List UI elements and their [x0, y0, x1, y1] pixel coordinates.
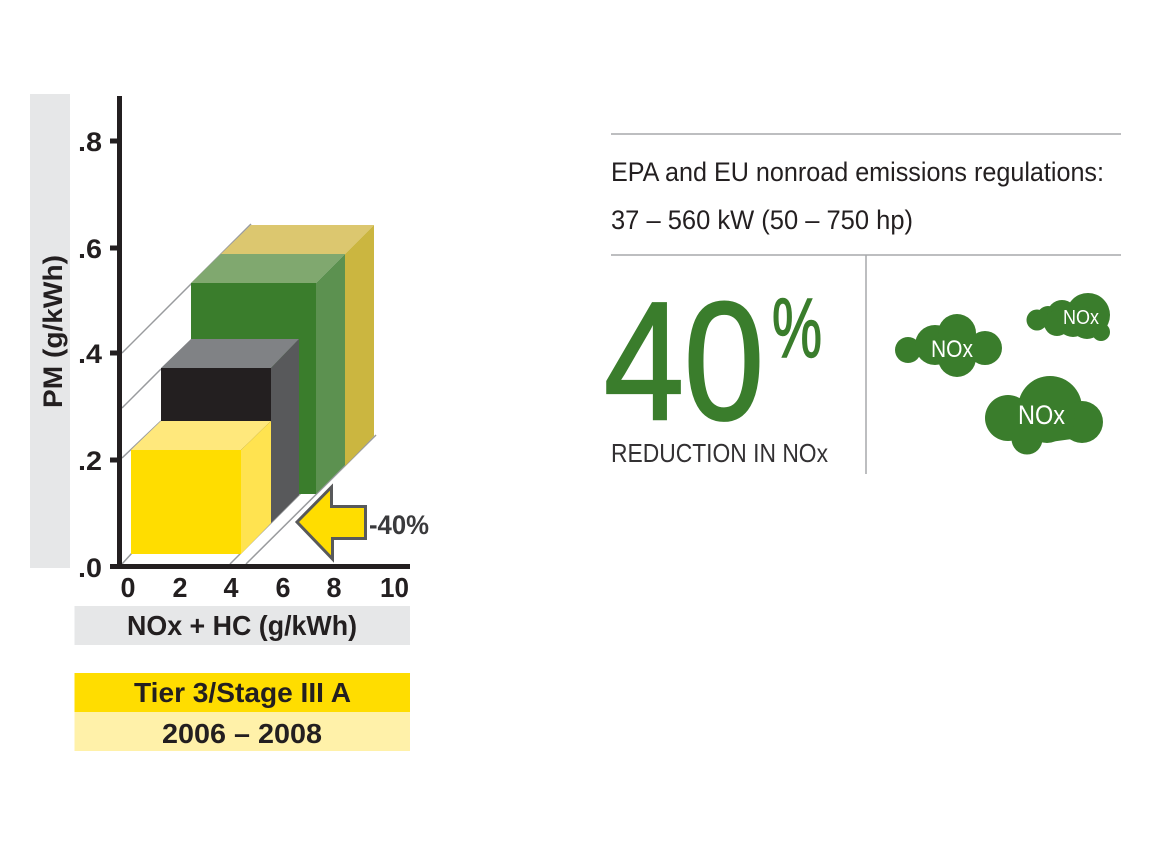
- x axis tick labels: [120, 572, 409, 603]
- y axis tick labels: .0: [78, 553, 102, 583]
- icon: NOx cloud bottom: NOx: [1018, 400, 1065, 430]
- y axis tick labels: [78, 127, 102, 583]
- icon: NOx cloud left: NOx: [931, 336, 973, 363]
- icon: NOx cloud top right: NOx: [1063, 307, 1099, 329]
- perspective guide lines: [122, 224, 376, 564]
- bar: back gold limit: [221, 225, 374, 466]
- legend: years: 2006 – 2008: [162, 718, 322, 749]
- x axis tick labels: 6: [276, 572, 290, 603]
- big stat: 40%: 40: [604, 267, 764, 455]
- divider lines: [611, 134, 1121, 474]
- bar: green limit: [191, 254, 345, 494]
- x axis tick labels: 2: [172, 572, 188, 603]
- arrow: -40% reduction: -40%: [369, 510, 429, 540]
- legend: years: [74, 712, 410, 751]
- bar: black limit: [161, 339, 299, 523]
- y axis tick labels: .4: [78, 339, 102, 369]
- regulation heading: [611, 157, 1104, 235]
- bar: yellow Tier 3 limit: [131, 421, 271, 554]
- big stat: 40%: %: [772, 281, 822, 375]
- axes: [110, 96, 410, 569]
- arrow: -40% reduction: [297, 487, 429, 559]
- legend: tier name: [74, 673, 410, 712]
- panel: emissions chart: [30, 94, 429, 751]
- x axis tick labels: 0: [120, 572, 136, 603]
- y axis tick labels: .8: [78, 127, 102, 157]
- y axis label: [30, 94, 70, 568]
- regulation heading: EPA and EU nonroad emissions regulations:: [611, 157, 1104, 187]
- y axis tick labels: .6: [78, 234, 102, 264]
- x axis tick labels: 4: [224, 572, 239, 603]
- y axis tick labels: .2: [78, 446, 102, 476]
- legend: tier name: Tier 3/Stage III A: [134, 677, 351, 708]
- icon: NOx cloud top right: [1026, 293, 1110, 341]
- x axis tick labels: 8: [326, 572, 342, 603]
- icon: NOx cloud left: [895, 314, 1002, 377]
- stat caption: REDUCTION IN NOx: [611, 438, 828, 468]
- panel: regulation summary: [604, 134, 1121, 474]
- x axis label: [74, 606, 410, 645]
- y axis label: PM (g/kWh): [38, 255, 68, 408]
- x axis tick labels: 10: [380, 572, 409, 603]
- icon: NOx cloud bottom: [985, 376, 1103, 454]
- x axis label: NOx + HC (g/kWh): [127, 610, 357, 641]
- regulation heading: 37 – 560 kW (50 – 750 hp): [611, 205, 913, 235]
